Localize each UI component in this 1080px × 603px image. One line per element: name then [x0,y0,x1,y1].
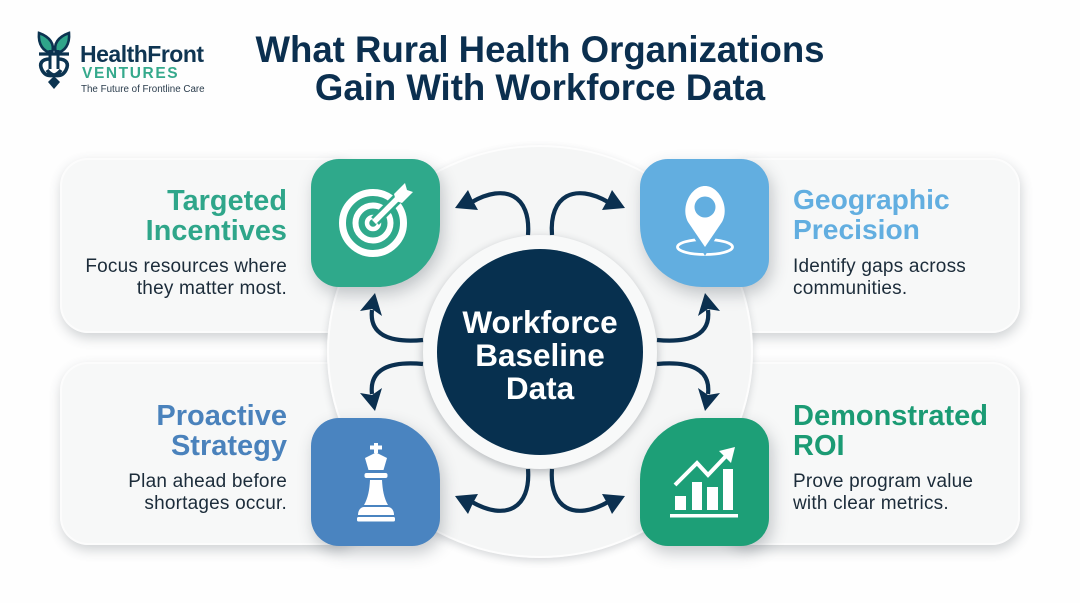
title: What Rural Health Organizations [255,29,825,70]
icon tile: location pin [640,159,769,287]
description [128,471,287,514]
description [793,256,966,299]
panel: targeted incentives card [60,158,360,333]
brand name: HealthFront [80,41,204,67]
brand sub-name: VENTURES [82,65,179,82]
text: geographic precision [793,183,966,299]
heading: Demonstrated [793,400,988,432]
central hub circle [423,235,657,469]
heading [156,400,287,462]
heading: Precision [793,213,920,245]
arrow: to targeted incentives bottom [360,293,423,341]
text: demonstrated ROI [793,400,988,514]
description: Focus resources where [85,256,287,277]
hub label: Workforce [462,304,618,340]
arrow: to geographic precision top [552,190,625,235]
description: shortages occur. [144,493,287,514]
heading [146,185,287,247]
description: with clear metrics. [793,493,949,514]
text: proactive strategy [128,400,287,514]
arrow: to proactive strategy top [360,363,423,411]
heading [793,400,988,462]
description [85,256,287,299]
icon: target with arrow [339,183,413,257]
arrow: to targeted incentives top [455,190,528,235]
arrow: to geographic precision bottom [657,293,720,341]
panel: proactive strategy card [60,362,360,545]
description: they matter most. [137,278,287,299]
hub label [462,304,618,406]
arrow: to proactive strategy bottom [455,469,528,514]
description [793,471,973,514]
icon: chess king [357,443,395,522]
arrow: to demonstrated ROI top [657,363,720,411]
title [255,29,825,108]
heading: Incentives [146,215,287,247]
icon: caduceus logo mark [38,31,70,89]
icon: bar chart with rising arrow [670,447,738,518]
central backdrop circle [327,145,753,558]
tagline: The Future of Frontline Care [81,84,205,95]
heading: Strategy [171,430,287,462]
icon tile: growth chart [640,418,769,546]
icon tile: target [311,159,440,287]
panel: geographic precision card [720,158,1020,333]
icon: map pin [676,186,734,256]
title: Gain With Workforce Data [315,67,765,108]
description: communities. [793,278,907,299]
description: Plan ahead before [128,471,287,492]
text: targeted incentives [85,185,287,299]
description: Prove program value [793,471,973,492]
heading: ROI [793,430,845,462]
panel: demonstrated ROI card [720,362,1020,545]
logo [38,31,205,95]
icon tile: chess king [311,418,440,546]
hub label: Data [506,370,574,406]
hub label: Baseline [475,337,605,373]
heading: Geographic [793,183,950,215]
heading: Proactive [156,400,287,432]
heading: Targeted [167,185,287,217]
description: Identify gaps across [793,256,966,277]
arrow: to demonstrated ROI bottom [552,469,625,514]
heading [793,183,950,245]
hub dark disc [437,249,643,455]
